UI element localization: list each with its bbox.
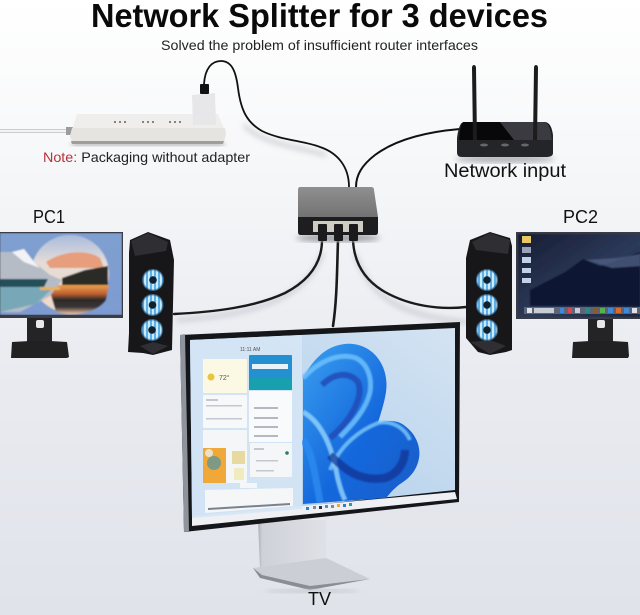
stand [27,316,52,344]
splitter [296,187,380,242]
PC2 monitor [516,232,640,358]
PC1 speaker [128,232,174,355]
adapter [192,93,216,125]
router shadow [455,155,555,163]
widgets panel: 72° [219,374,230,382]
power strip [0,84,226,146]
fans [476,269,498,291]
stocks card [203,395,247,428]
antennas [472,65,477,140]
desktop icons [522,236,531,283]
label PC1: PC1 [33,207,65,227]
taskbar icons [306,503,352,510]
cable: to PC2 [353,240,466,308]
clock: 11:11 AM [240,347,260,353]
TV [180,322,460,593]
stand shadow [264,589,360,593]
PC2 speaker [466,232,512,355]
fans [142,269,164,291]
cable shadows [178,126,466,322]
widgets panel [190,335,302,518]
cable: network input [356,129,460,187]
TV screen [190,328,455,518]
cable: power [204,61,349,187]
strip body [70,114,226,143]
TV stand [253,520,370,593]
photos card [203,430,247,483]
bottom card [205,488,293,513]
router body [457,122,553,157]
stand [588,316,613,344]
label PC2: PC2 [563,207,598,227]
screen [516,232,640,319]
strip cord [0,129,66,133]
cable: to PC1 [174,240,322,314]
wallpaper swirl [303,344,419,504]
subtitle: Solved the problem of insufficient router interfaces [161,37,478,53]
news card [249,355,292,390]
tasks card [250,443,292,477]
calendar card [249,391,292,442]
weather card [203,359,247,393]
label TV: TV [308,589,331,609]
add widgets button [240,483,257,488]
taskbar and chin [192,492,457,526]
strip shadow [72,142,224,146]
cables [174,61,466,326]
router [455,65,555,163]
PC1 monitor [0,232,123,358]
note: Note: Packaging without adapter [43,149,250,165]
network input label: Network input [444,161,567,182]
TV frame [180,322,460,532]
splitter shadow [296,234,380,242]
dock [524,307,640,314]
screen [0,232,123,318]
ports [313,221,363,232]
cable: to TV [333,240,338,326]
